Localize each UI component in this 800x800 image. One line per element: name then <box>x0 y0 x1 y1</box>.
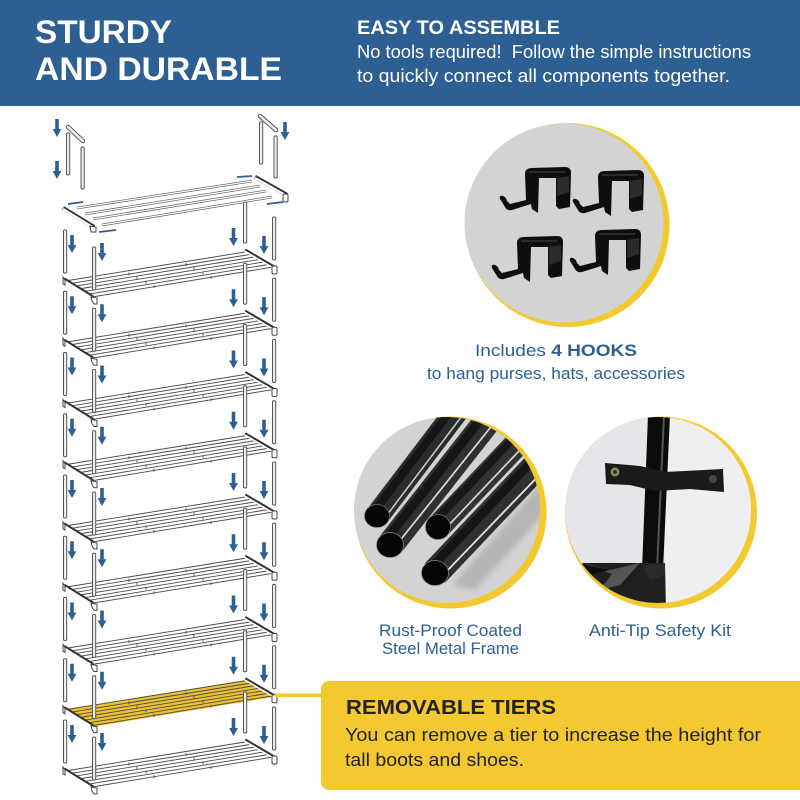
title: AND DURABLE <box>35 51 282 87</box>
shelf base <box>582 563 666 603</box>
top left hardware <box>53 119 84 189</box>
panel body: You can remove a tier to increase the height for <box>345 725 761 745</box>
pole <box>642 415 670 570</box>
icon: hook 3 <box>492 236 563 282</box>
tier 7 <box>63 570 277 672</box>
tube 2 <box>376 420 496 558</box>
tier 5 <box>63 447 277 549</box>
photo: anti-tip kit <box>565 416 757 608</box>
easy to assemble text: EASY TO ASSEMBLE <box>357 18 560 39</box>
tubes caption: Steel Metal Frame <box>382 639 519 658</box>
tier 9 <box>63 692 277 794</box>
tier 6 <box>63 508 277 610</box>
icon: hook 1 <box>500 167 571 213</box>
tubes caption <box>379 621 522 658</box>
photo: hooks <box>464 123 670 327</box>
panel body: tall boots and shoes. <box>345 750 524 770</box>
connector line <box>275 694 323 697</box>
tier 3 <box>63 324 277 426</box>
tube 3 <box>425 438 522 540</box>
panel: removable tiers <box>321 681 800 790</box>
strap <box>605 463 724 492</box>
panel heading: REMOVABLE TIERS <box>346 697 556 719</box>
easy to assemble text: to quickly connect all components together. <box>357 66 730 86</box>
hooks caption: to hang purses, hats, accessories <box>427 364 685 383</box>
tube 4 <box>422 458 548 586</box>
hooks caption <box>427 341 685 383</box>
top shelf exploded <box>63 176 288 232</box>
hooks caption: Includes 4 HOOKS <box>475 341 637 360</box>
icon: hook 2 <box>573 170 644 216</box>
header banner <box>0 0 800 106</box>
kit caption: Anti-Tip Safety Kit <box>589 621 731 640</box>
easy to assemble text <box>357 18 751 86</box>
panel body <box>345 725 761 770</box>
assembly diagram <box>53 116 289 794</box>
photo: steel tubes <box>354 404 552 608</box>
tier 1 <box>63 202 277 304</box>
tier 8 highlighted <box>63 631 277 733</box>
icon: hook 4 <box>570 229 641 275</box>
top right hardware <box>260 116 289 178</box>
easy to assemble text: No tools required! Follow the simple instructions <box>357 42 751 62</box>
tier 2 <box>63 263 277 365</box>
tubes caption: Rust-Proof Coated <box>379 621 522 640</box>
title: STURDY <box>35 14 172 50</box>
title <box>35 14 282 87</box>
tier 4 <box>63 386 277 488</box>
tube 1 <box>364 417 466 528</box>
